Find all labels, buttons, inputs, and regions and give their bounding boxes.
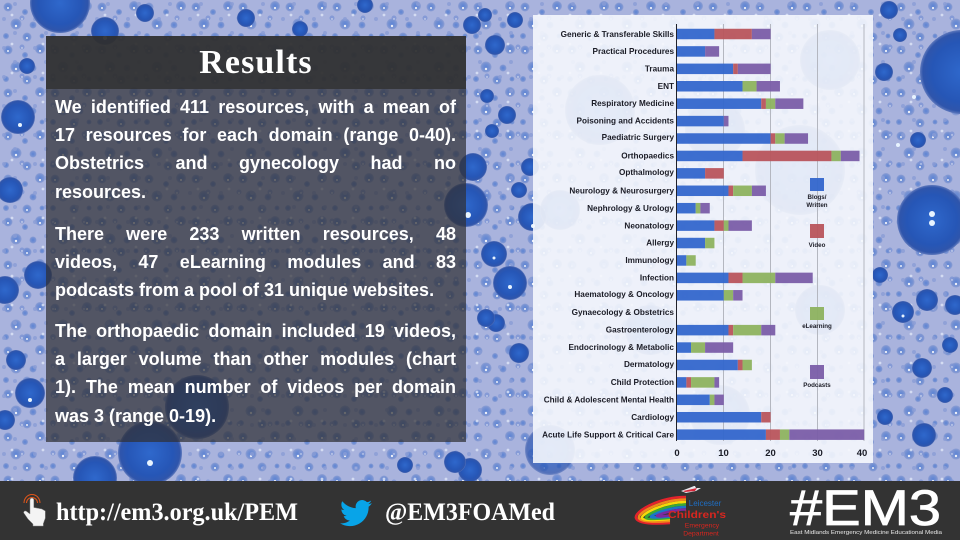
paragraph: resources overview: resources. — [55, 182, 146, 202]
paragraph: resources overview — [55, 97, 456, 202]
category labels: Cardiology — [631, 413, 674, 422]
legend: eLearning — [802, 323, 832, 330]
category labels: Practical Procedures — [593, 47, 674, 56]
category labels: Acute Life Support & Critical Care — [542, 430, 674, 440]
category labels: Child Protection — [611, 378, 674, 387]
category labels: Neurology & Neurosurgery — [569, 186, 674, 196]
stacked bars — [677, 29, 864, 440]
category labels: Dermatology — [624, 360, 674, 369]
paragraph: orthopaedic videos: 1). The mean number of videos per domain — [55, 377, 456, 397]
grid and axis — [676, 24, 864, 441]
category labels: Paediatric Surgery — [602, 133, 674, 142]
paragraph: orthopaedic videos: a larger volume than other modules (chart — [55, 349, 456, 369]
paragraph: resource types: There were 233 written resources, 48 — [55, 224, 456, 244]
logo: Leicester Children's Emergency Department: Department — [683, 530, 719, 538]
paragraph: resource types: podcasts from a pool of 31 unique websites. — [55, 280, 434, 300]
#EM3 brand: #EM3 — [790, 480, 941, 536]
category labels: Gastroenterology — [606, 326, 674, 334]
category labels: Immunology — [625, 256, 674, 265]
legend: Blogs/ — [808, 194, 827, 201]
website link: http://em3.org.uk/PEM — [56, 499, 298, 526]
panel: results text — [46, 36, 466, 442]
category labels: Neonatology — [624, 222, 674, 230]
category labels: Haematology & Oncology — [574, 290, 674, 299]
icon: twitter bird — [340, 500, 372, 526]
twitter handle: @EM3FOAMed — [385, 499, 555, 526]
logo: Leicester Children's Emergency Department: Emergency — [685, 522, 720, 530]
category labels: Nephrology & Urology — [587, 204, 674, 213]
x axis numbers: 20 — [765, 448, 776, 459]
x axis numbers — [674, 448, 867, 459]
footer bar — [0, 480, 960, 540]
category labels: Infection — [640, 274, 674, 282]
paragraph: orthopaedic videos: The orthopaedic domain included 19 videos, — [55, 321, 456, 341]
paragraph: resources overview: 17 resources for each domain (range 0-40). — [55, 125, 456, 145]
legend: Video — [809, 242, 826, 249]
icon: tapping hand — [24, 494, 45, 526]
category labels: Generic & Transferable Skills — [561, 30, 674, 39]
paragraph: orthopaedic videos — [55, 321, 456, 426]
paragraph: resource types — [55, 224, 456, 300]
category labels: Orthopaedics — [621, 152, 674, 160]
paragraph: resource types: videos, 47 eLearning modules and 83 — [55, 252, 456, 272]
x axis numbers: 0 — [674, 448, 680, 459]
logo: Leicester Children's Emergency Department — [636, 486, 726, 538]
category labels: Poisoning and Accidents — [576, 116, 674, 126]
category labels: Allergy — [646, 238, 674, 248]
category labels: Child & Adolescent Mental Health — [544, 396, 674, 404]
x axis numbers: 40 — [857, 448, 867, 459]
paragraph: resources overview: Obstetrics and gynecology had no — [55, 153, 456, 173]
chart panel — [533, 15, 873, 463]
heading: Results — [46, 36, 466, 89]
category labels — [542, 30, 674, 440]
legend: Podcasts — [803, 382, 831, 389]
paragraph: resources overview: We identified 411 resources, with a mean of — [55, 97, 456, 117]
x axis numbers: 30 — [812, 448, 823, 459]
legend — [802, 178, 832, 389]
logo: Leicester Children's Emergency Department: Leicester — [689, 499, 722, 508]
#EM3 brand: East Midlands Emergency Medicine Educational Media — [790, 530, 942, 536]
paragraph: orthopaedic videos: was 3 (range 0-19). — [55, 406, 216, 426]
legend: Written — [806, 202, 828, 209]
logo: Leicester Children's Emergency Department: Children's — [668, 509, 726, 521]
category labels: Respiratory Medicine — [591, 99, 674, 108]
category labels: Endocrinology & Metabolic — [568, 343, 674, 352]
category labels: Trauma — [645, 64, 674, 74]
category labels: ENT — [658, 82, 674, 91]
category labels: Opthalmology — [619, 168, 674, 177]
category labels: Gynaecology & Obstetrics — [572, 308, 674, 317]
x axis numbers: 10 — [718, 448, 729, 459]
heading: Results: Results — [199, 44, 313, 81]
